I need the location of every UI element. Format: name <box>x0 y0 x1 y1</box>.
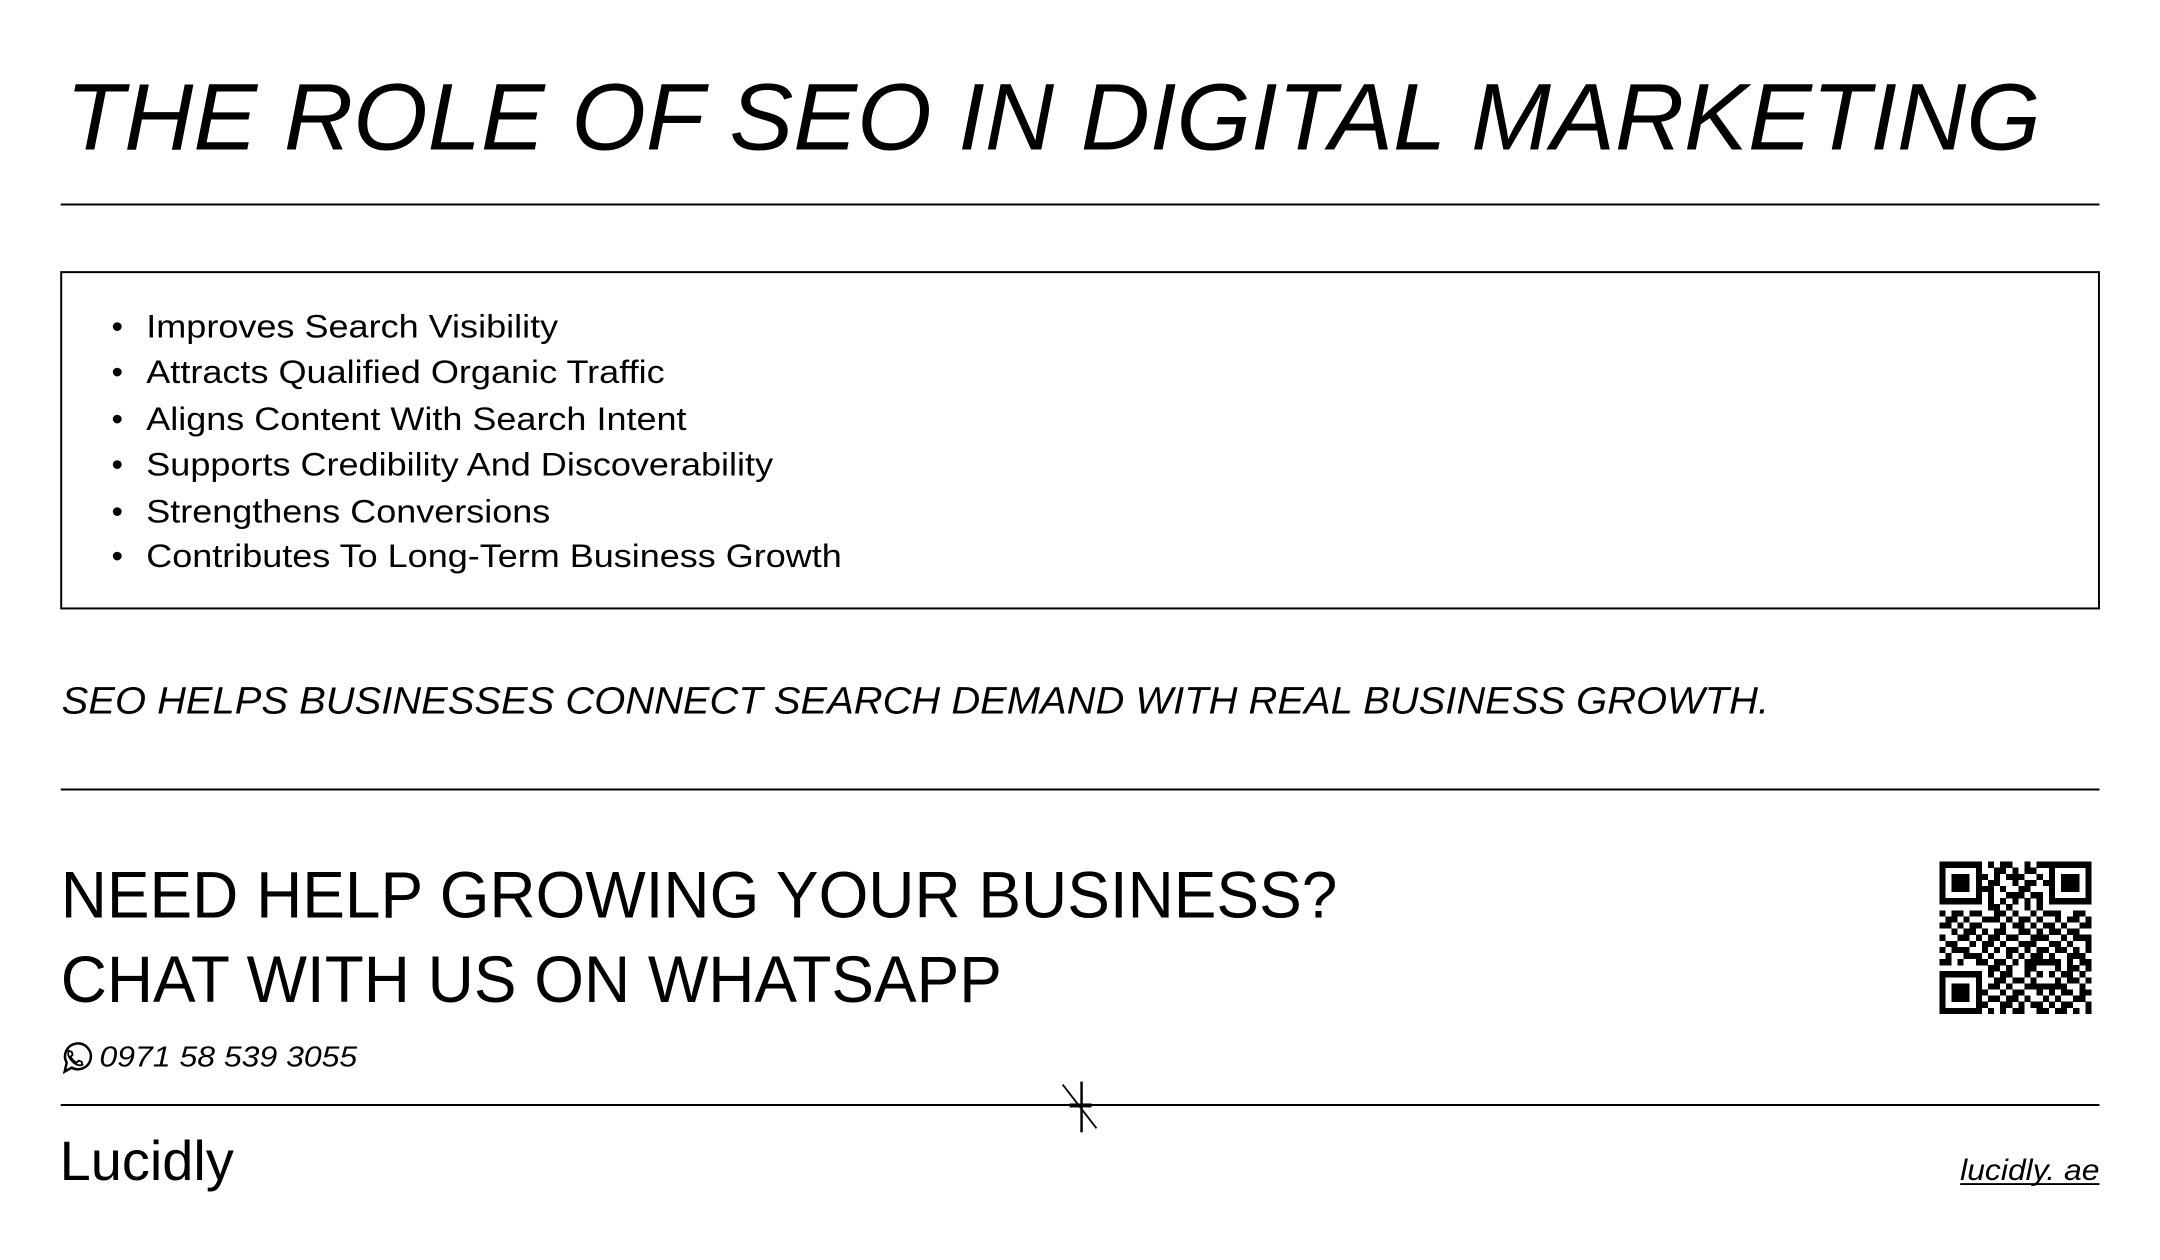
QR code <box>1939 865 2091 1011</box>
bullet list: Attracts Qualified Organic Traffic <box>146 353 665 390</box>
bullet list: • <box>111 400 123 437</box>
bullet list <box>111 307 842 574</box>
bullet list: • <box>111 307 123 344</box>
bullet list: • <box>111 537 123 574</box>
bullet list: • <box>111 353 123 390</box>
bullet list: Supports Credibility And Discoverability <box>146 446 774 483</box>
bullet list: • <box>111 492 123 529</box>
bullet list: Strengthens Conversions <box>146 492 550 529</box>
bullet list: Contributes To Long-Term Business Growth <box>146 537 842 574</box>
CTA heading: NEED HELP GROWING YOUR BUSINESS? <box>61 858 1337 931</box>
phone contact: 0971 58 539 3055 <box>100 1042 358 1074</box>
title: THE ROLE OF SEO IN DIGITAL MARKETING <box>66 64 2041 170</box>
tagline: SEO HELPS BUSINESSES CONNECT SEARCH DEMAND WITH REAL BUSINESS GROWTH. <box>62 680 1769 722</box>
logo: Lucidly: Lucidly <box>60 1130 234 1192</box>
bullet list: Aligns Content With Search Intent <box>146 400 687 437</box>
icon: sparkle star <box>1063 1082 1096 1132</box>
CTA heading: CHAT WITH US ON WHATSAPP <box>61 943 1002 1016</box>
icon: whatsapp <box>65 1043 91 1072</box>
panel: benefits list <box>61 272 2099 608</box>
CTA heading <box>61 858 1337 1016</box>
bullet list: • <box>111 446 123 483</box>
website link: lucidly. ae <box>1960 1154 2099 1187</box>
bullet list: Improves Search Visibility <box>146 307 559 344</box>
